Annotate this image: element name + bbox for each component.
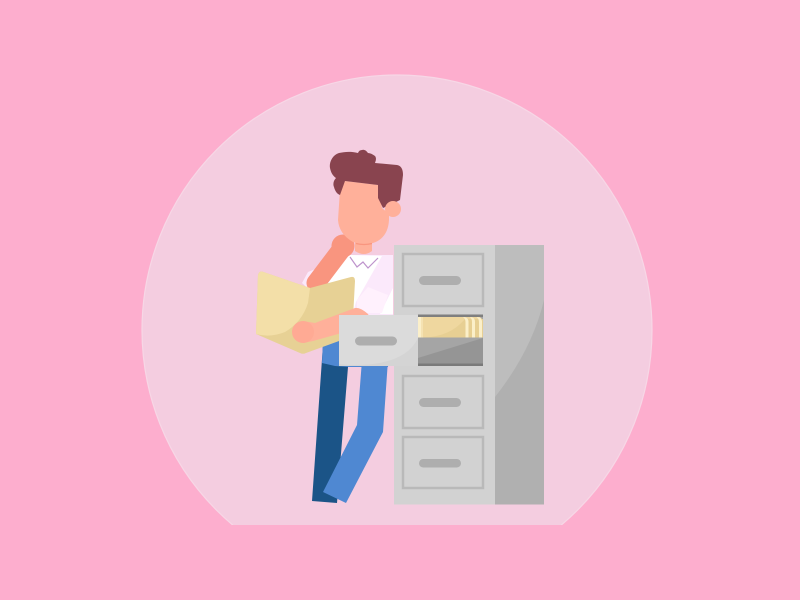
- folders in drawer: [418, 317, 483, 338]
- raised arm and hand: [316, 234, 354, 283]
- open folder: [256, 271, 355, 354]
- backdrop circle: [142, 74, 652, 525]
- third drawer: [403, 376, 483, 428]
- cabinet front: [394, 245, 495, 504]
- forearm holding folder: [292, 308, 372, 343]
- trousers: front leg: [323, 360, 388, 503]
- filing cabinet: [339, 245, 544, 504]
- open drawer front: [339, 315, 418, 366]
- neck: [355, 236, 372, 254]
- trousers: back leg: [312, 345, 350, 503]
- person: [256, 150, 403, 503]
- top drawer: [403, 254, 483, 306]
- bottom drawer: [403, 437, 483, 488]
- drawer interior: [418, 314, 483, 366]
- trousers: hips: [322, 340, 390, 367]
- shirt: [302, 255, 393, 325]
- cabinet side: [495, 245, 544, 504]
- illustration: person searching a filing cabinet: [142, 74, 652, 525]
- head: [330, 150, 403, 244]
